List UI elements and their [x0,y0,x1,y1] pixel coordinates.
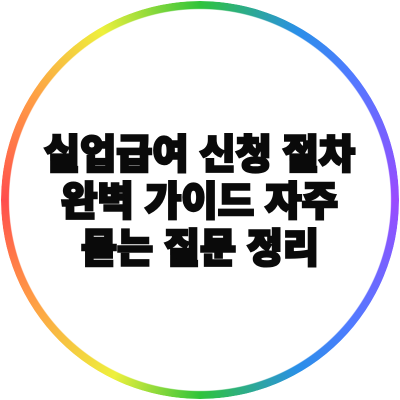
title line 2: 완벽 가이드 자주 [61,180,338,224]
title line 3: 묻는 질문 정리 [81,227,319,271]
title line 1: 실업급여 신청 절차 [44,133,355,177]
